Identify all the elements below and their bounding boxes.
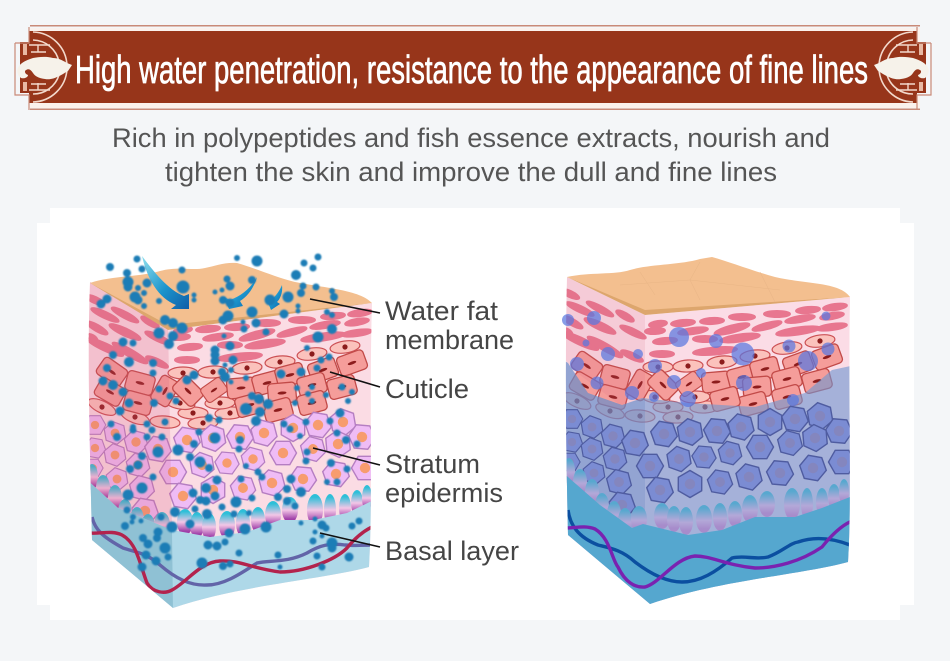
layer labels: Stratum bbox=[385, 449, 480, 479]
layer labels: Basal layer bbox=[385, 536, 519, 566]
absorbed moisture bubbles bbox=[562, 311, 834, 407]
skin surface: water fat membrane bbox=[90, 263, 372, 330]
water penetration arrows bbox=[142, 256, 282, 310]
left skin block: water penetrating bbox=[83, 254, 380, 615]
skin surface: right block bbox=[567, 257, 850, 315]
layer labels: membrane bbox=[385, 325, 514, 355]
layer labels bbox=[385, 296, 519, 566]
ornament: left fish medallion bbox=[15, 27, 72, 110]
subtitle text: Rich in polypeptides and fish essence extracts, nourish and bbox=[112, 123, 830, 153]
subtitle text: tighten the skin and improve the dull and fine lines bbox=[165, 157, 777, 187]
subtitle text bbox=[112, 123, 830, 187]
layer labels: Water fat bbox=[385, 296, 499, 326]
layer labels: Cuticle bbox=[385, 374, 469, 404]
water droplets bbox=[97, 254, 362, 571]
ornament: right fish medallion bbox=[874, 27, 931, 110]
right skin block: hydrated result bbox=[560, 255, 856, 610]
leader lines to labels bbox=[310, 299, 380, 547]
title banner bbox=[15, 25, 931, 110]
white diagram panel bbox=[37, 208, 914, 620]
layer labels: epidermis bbox=[385, 478, 503, 508]
